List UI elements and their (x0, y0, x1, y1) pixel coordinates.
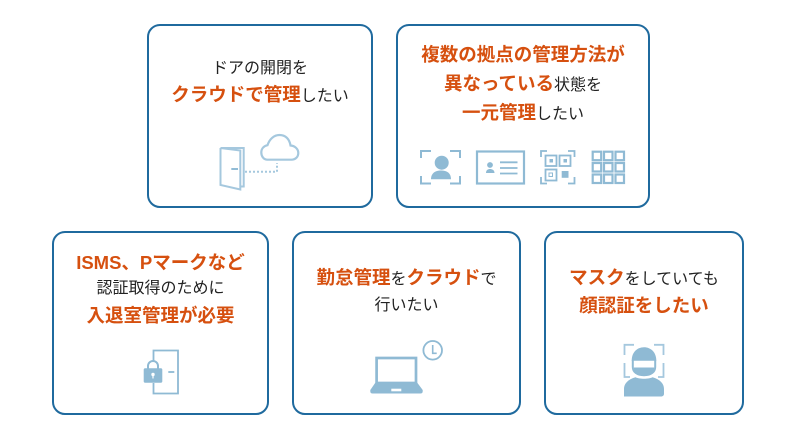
icon: ID card (476, 150, 526, 185)
icon: face recognition (420, 150, 461, 184)
heading: attendance in cloud: 勤怠管理をクラウドで (316, 267, 497, 288)
icon: laptop with clock (370, 340, 443, 394)
heading: door cloud management: クラウドで管理したい (171, 84, 349, 105)
panel: attendance management (292, 231, 521, 415)
icon: masked face recognition (624, 344, 664, 396)
heading: ISMS and P mark: ISMS、Pマークなど (76, 252, 245, 273)
panel: certification entry management (52, 231, 269, 415)
icon: door with padlock (144, 350, 179, 394)
icon: keypad grid (592, 150, 626, 184)
panel: multi-site management (396, 24, 650, 208)
heading: line one: 複数の拠点の管理方法が (421, 44, 625, 65)
text: for certification: 認証取得のために (96, 280, 224, 297)
heading: entry management required: 入退室管理が必要 (86, 305, 234, 326)
heading: line two: 異なっている状態を (444, 73, 602, 94)
icon: QR code (540, 150, 576, 184)
heading: line three: 一元管理したい (462, 102, 584, 123)
text: door cloud management: ドアの開閉を (212, 60, 308, 77)
panel: door cloud management (147, 24, 373, 208)
text: want to do: 行いたい (374, 297, 438, 314)
heading: while wearing mask: マスクをしていても (569, 267, 719, 288)
icon: door connected to cloud (220, 134, 300, 191)
heading: want face recognition: 顔認証をしたい (579, 295, 709, 316)
panel: face recognition with mask (544, 231, 744, 415)
